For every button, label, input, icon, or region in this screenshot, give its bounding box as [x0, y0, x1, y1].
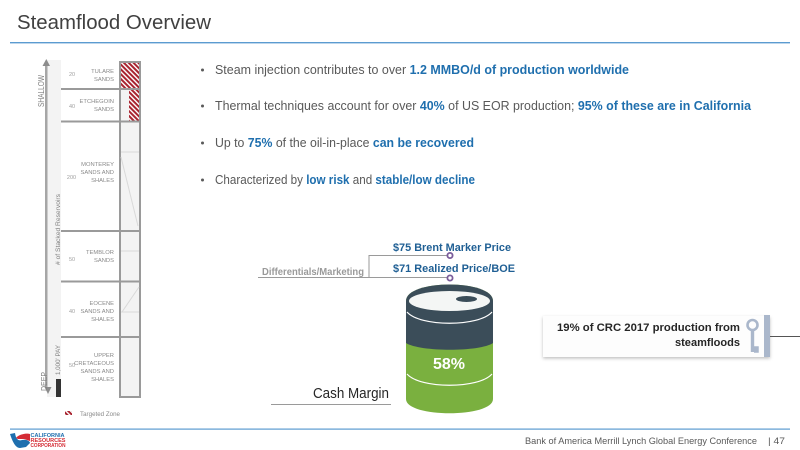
- targeted hatch zones: [120, 62, 140, 122]
- logo: california resources: RESOURCES: [30, 438, 66, 444]
- label: brent marker price: $75 Brent Marker Price: [393, 242, 511, 254]
- stratum labels: SANDS: [94, 258, 114, 264]
- stratum labels: SHALES: [91, 377, 114, 383]
- stratum labels: SANDS AND: [80, 369, 114, 375]
- icon: oil barrel: [406, 284, 493, 413]
- stratum labels: SHALES: [91, 178, 114, 184]
- label: realized price: $71 Realized Price/BOE: [393, 263, 515, 275]
- label: differentials: Differentials/Marketing: [262, 266, 364, 278]
- stratum labels: TULARE: [91, 69, 114, 75]
- logo: california resources: CORPORATION: [30, 443, 66, 449]
- stratum labels: SHALES: [91, 317, 114, 323]
- page number: | 47: [768, 436, 785, 447]
- footer text: Bank of America Merrill Lynch Global Energy Conference: [525, 436, 757, 447]
- marker: realized price: [447, 275, 453, 281]
- reservoir counts: [67, 72, 76, 369]
- stratum labels: MONTEREY: [81, 162, 114, 168]
- label: 1000 ft pay: 1,000' PAY: [55, 344, 62, 375]
- label: cash margin: Cash Margin: [313, 385, 389, 402]
- icon: key: [748, 320, 758, 352]
- barrel percentage: 58%: [433, 356, 465, 373]
- panel: reservoir stack column: [36, 59, 140, 397]
- bullet list: [201, 63, 752, 187]
- reservoir counts: 50: [69, 257, 75, 263]
- legend: targeted zone: [65, 411, 121, 418]
- logo: california resources: [10, 433, 66, 449]
- stratum labels: CRETACEOUS: [74, 361, 114, 367]
- stratum labels: TEMBLOR: [86, 250, 114, 256]
- label: shallow: SHALLOW: [36, 75, 46, 107]
- legend: targeted zone: Targeted Zone: [80, 412, 121, 418]
- strata lines: [61, 62, 140, 397]
- callout: [543, 315, 800, 357]
- logo: california resources: CALIFORNIA: [30, 433, 65, 439]
- stratum labels: SANDS: [94, 107, 114, 113]
- pay scale bar: [56, 379, 61, 397]
- callout text: steamfloods: [675, 337, 740, 349]
- title: Steamflood Overview: [17, 12, 212, 34]
- stratum labels: SANDS: [94, 77, 114, 83]
- stratum labels: UPPER: [94, 353, 114, 359]
- callout text: 19% of CRC 2017 production from: [557, 322, 740, 334]
- stratum labels: [74, 69, 114, 383]
- price connector lines: [258, 256, 450, 278]
- bullet 2: Thermal techniques account for over 40% of US EOR production; 95% of these are in California: [215, 99, 752, 113]
- stratum labels: SANDS AND: [80, 170, 114, 176]
- depth arrow: [42, 59, 52, 394]
- marker: brent price: [447, 253, 453, 258]
- stratum labels: SANDS AND: [80, 309, 114, 315]
- bullet 3: Up to 75% of the oil-in-place can be recovered: [215, 136, 474, 150]
- reservoir counts: 40: [69, 309, 75, 315]
- reservoir counts: 50: [69, 363, 75, 369]
- footer line: [10, 428, 790, 430]
- label: number of stacked reservoirs: # of Stacked Reservoirs: [55, 193, 62, 265]
- stratum labels: ETCHEGOIN: [80, 99, 114, 105]
- bullet 4: Characterized by low risk and stable/low decline: [215, 173, 475, 187]
- reservoir counts: 40: [69, 104, 75, 110]
- reservoir counts: 20: [69, 72, 75, 78]
- stratum labels: EOCENE: [90, 301, 114, 307]
- label: cash margin: [271, 385, 391, 405]
- label: deep: DEEP: [39, 372, 49, 391]
- callout text: [557, 322, 740, 349]
- bullet 1: Steam injection contributes to over 1.2 MMBO/d of production worldwide: [215, 63, 629, 77]
- reservoir counts: 200: [67, 175, 76, 181]
